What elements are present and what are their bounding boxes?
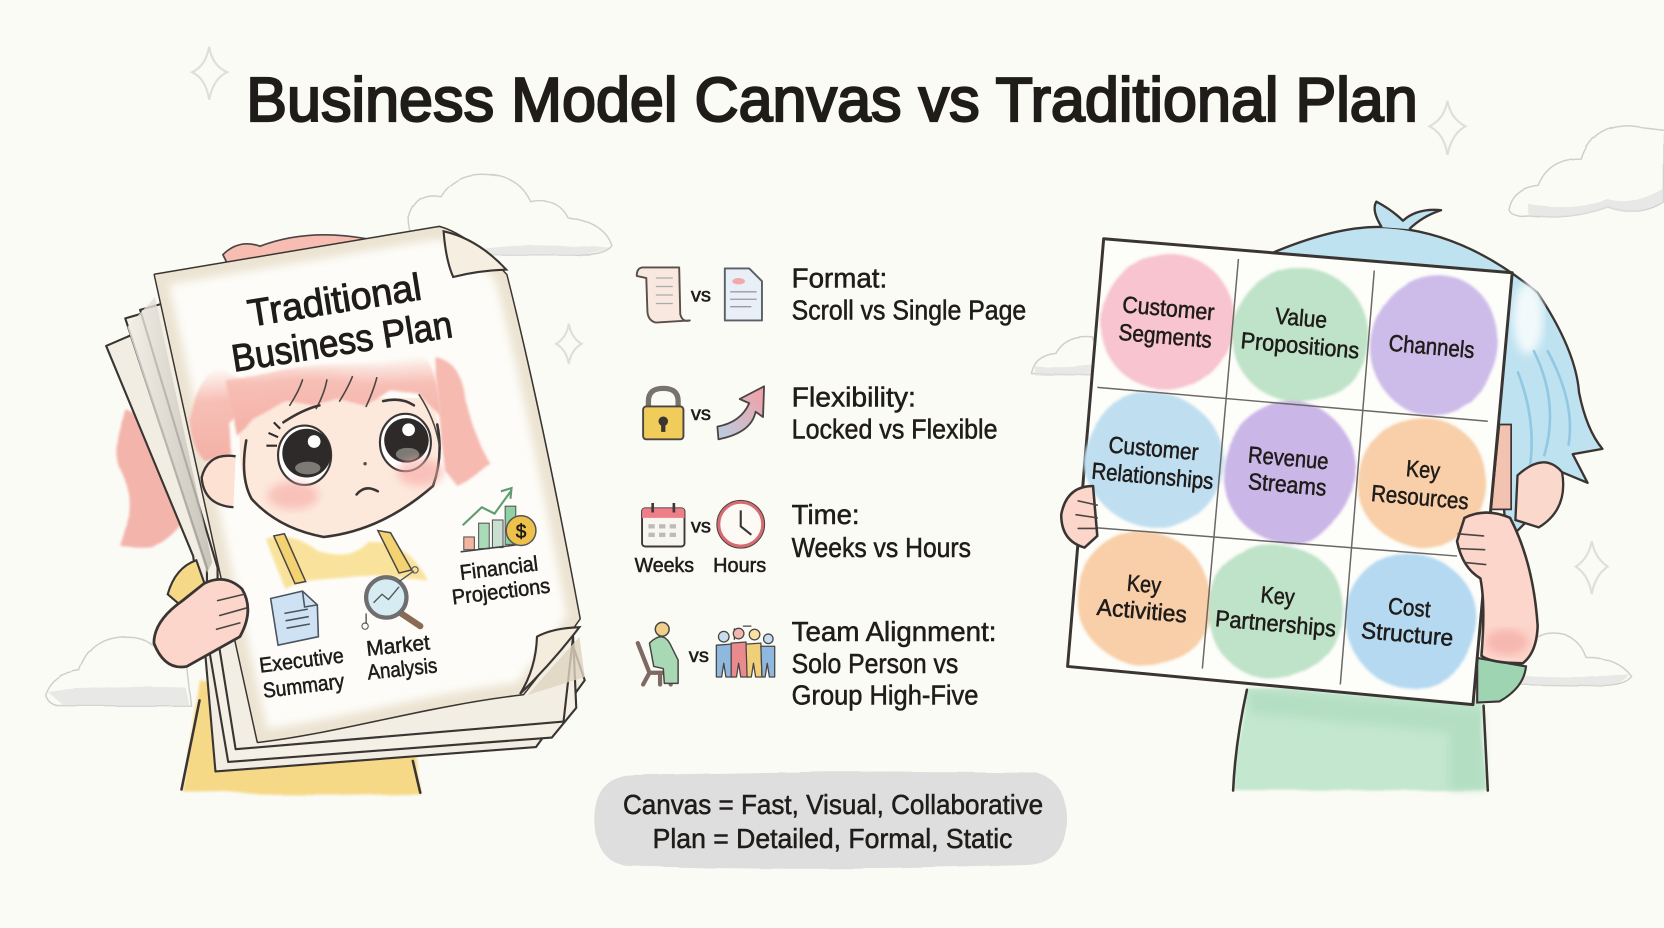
comparison row: time: Weeks vs Hours [792, 532, 971, 563]
shirt [1235, 688, 1488, 791]
canvas labels: Cost [1387, 593, 1432, 622]
canvas labels: Customer [1108, 431, 1200, 465]
summary callout: Plan = Detailed, Formal, Static [653, 823, 1013, 854]
icon: financial chart [461, 488, 536, 552]
hair tuft [1375, 202, 1441, 229]
grid lines [1078, 259, 1488, 684]
icon: executive summary document [271, 591, 318, 645]
left character: girl holding traditional plan [106, 227, 585, 795]
canvas labels: Propositions [1240, 327, 1360, 364]
icon: clock [717, 500, 765, 548]
color blobs [1078, 235, 1513, 688]
right character: child holding canvas [1061, 202, 1602, 791]
left hand [1061, 486, 1097, 548]
canvas labels: Resources [1370, 480, 1470, 514]
comparison row: team alignment [638, 616, 996, 711]
sleeve [1477, 658, 1526, 702]
title: Business Model Canvas vs Traditional Plan [246, 65, 1418, 135]
right pigtail [436, 358, 491, 485]
elbow tint [1486, 629, 1528, 655]
comparison row: team alignment: vs [689, 646, 709, 667]
ponytail [116, 410, 187, 548]
brows [283, 400, 414, 422]
canvas labels: Key [1260, 581, 1296, 610]
mouth and nose [357, 488, 378, 495]
icon: calendar [642, 503, 684, 547]
shirt outlines [1233, 690, 1488, 791]
comparison row: format [637, 263, 1026, 325]
back hair top [223, 235, 366, 265]
main paper page [155, 227, 579, 742]
comparison row: time [635, 499, 971, 577]
comparison row: time: Weeks [635, 554, 694, 577]
bang strokes [290, 377, 439, 446]
comparison row: flexibility [643, 381, 998, 444]
shirt shading [1248, 690, 1486, 791]
paper labels [258, 552, 551, 703]
icon: single page [725, 268, 762, 320]
paper labels: Executive [258, 644, 345, 678]
paper title: Traditional [245, 266, 424, 335]
comparison row: time: Time: [792, 499, 860, 530]
comparison row: team alignment: Team Alignment: [792, 616, 996, 647]
paper title: Business Plan [229, 303, 455, 381]
ear [202, 456, 236, 507]
comparison row: team alignment: Solo Person vs [792, 648, 958, 679]
comparison row: team alignment: Group High-Five [792, 680, 978, 711]
canvas labels: Revenue [1247, 441, 1330, 474]
icon: curved arrow [717, 386, 764, 439]
left hair [187, 366, 263, 461]
icon: solo person [638, 622, 678, 684]
shirt [266, 539, 427, 590]
hair strands [1518, 350, 1570, 478]
paper fade under title [212, 314, 437, 365]
comparison row: flexibility: vs [691, 404, 711, 425]
right arm and hand [1457, 513, 1538, 663]
canvas labels: Key [1405, 455, 1441, 484]
ear [1515, 462, 1563, 527]
overalls outlines [181, 700, 420, 793]
canvas labels: Key [1126, 570, 1162, 599]
hair highlight [1513, 282, 1543, 354]
summary callout [594, 771, 1067, 869]
comparison row: flexibility: Locked vs Flexible [792, 413, 998, 444]
straps [274, 531, 412, 584]
paper stack [106, 297, 585, 771]
right eye [380, 414, 431, 471]
icon: group high-five [716, 626, 775, 677]
paper labels: Summary [262, 670, 346, 703]
canvas labels [1091, 291, 1476, 651]
comparison row: format: vs [691, 285, 711, 306]
page edge tint [155, 227, 579, 742]
page fold top [444, 231, 506, 277]
canvas labels: Value [1274, 303, 1328, 333]
bangs [225, 357, 440, 435]
face [240, 398, 439, 537]
paper title [229, 266, 455, 381]
paper labels: Financial [459, 552, 539, 585]
decorative sparkles [192, 47, 1608, 594]
comparison row: format: Scroll vs Single Page [792, 294, 1026, 325]
canvas labels: Segments [1118, 319, 1213, 353]
page curl bottom [520, 627, 579, 694]
cheeks [267, 458, 444, 509]
hair [1268, 227, 1602, 541]
stack corner shade [527, 637, 585, 695]
face strip [1491, 424, 1511, 509]
canvas labels: Customer [1121, 291, 1216, 325]
comparison row: format: Format: [792, 263, 887, 294]
canvas labels: Relationships [1091, 458, 1214, 494]
comparison row: time: Hours [713, 554, 766, 577]
icon: market analysis magnifier [362, 567, 420, 629]
icon: lock [643, 388, 683, 439]
left eye [266, 422, 331, 485]
canvas labels: Channels [1388, 330, 1476, 363]
icon: financial chart: $ [516, 522, 527, 543]
canvas labels: Activities [1096, 594, 1188, 628]
summary callout: Canvas = Fast, Visual, Collaborative [623, 789, 1043, 820]
clouds [46, 125, 1664, 706]
canvas labels: Partnerships [1214, 605, 1337, 642]
arm and hand [154, 579, 248, 667]
comparison row: flexibility: Flexibility: [792, 381, 916, 412]
comparison row: time: vs [691, 517, 711, 538]
canvas labels: Streams [1247, 468, 1328, 501]
sleeve [168, 560, 210, 607]
canvas labels: Structure [1360, 617, 1454, 651]
paper labels: Analysis [366, 654, 438, 685]
overalls [183, 679, 420, 795]
canvas board [1068, 239, 1512, 705]
paper labels: Projections [451, 575, 551, 609]
stack shading [127, 297, 212, 573]
face outline [244, 424, 440, 537]
paper labels: Market [365, 631, 431, 661]
icon: scroll [637, 267, 690, 323]
